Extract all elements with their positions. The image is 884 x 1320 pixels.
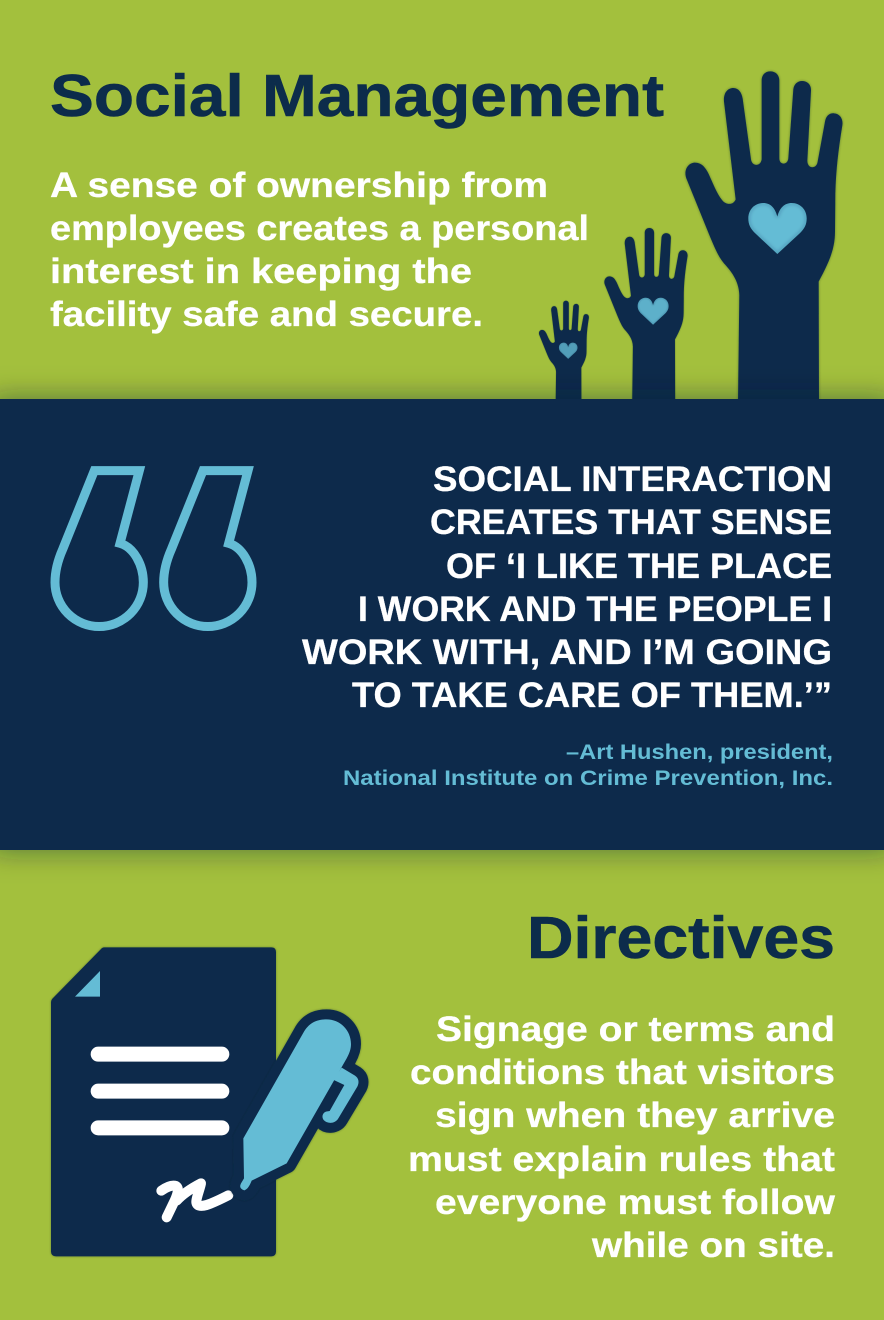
text block: pull quote: CREATES THAT SENSE: [430, 503, 832, 542]
icon: quotation marks: [55, 471, 252, 626]
icon: pen: [240, 1019, 359, 1190]
text block: social management description: employees creates a personal: [50, 209, 589, 248]
text block: directives description: while on site.: [591, 1226, 835, 1265]
heading: Directives: Directives: [527, 905, 835, 971]
icon: text lines: [91, 1047, 229, 1135]
text block: directives description: conditions that visitors: [410, 1053, 835, 1092]
icon: signed document with pen: [51, 947, 359, 1256]
text block: directives description: [408, 1010, 836, 1265]
icon: document page: [51, 947, 276, 1256]
text block: directives description: everyone must follow: [435, 1183, 836, 1222]
text block: social management description: A sense of ownership from: [50, 166, 548, 205]
text block: pull quote: [302, 460, 832, 715]
text block: pull quote: TO TAKE CARE OF THEM.’”: [352, 676, 832, 715]
text block: social management description: interest in keeping the: [50, 252, 472, 291]
text block: attribution: National Institute on Crime Prevention, Inc.: [343, 767, 833, 790]
text block: directives description: Signage or terms and: [436, 1010, 835, 1049]
icon: three raised hands with hearts: [539, 71, 843, 406]
text block: pull quote: OF ‘I LIKE THE PLACE: [446, 547, 832, 586]
text block: directives description: sign when they arrive: [435, 1096, 835, 1135]
icon: signature: [161, 1183, 228, 1217]
text block: directives description: must explain rules that: [408, 1140, 835, 1179]
title: Social Management: Social Management: [50, 63, 664, 129]
text block: pull quote: I WORK AND THE PEOPLE I: [358, 590, 832, 629]
icon: medium hand: [604, 228, 688, 404]
text block: social management description: [50, 166, 589, 334]
text block: social management description: facility safe and secure.: [50, 295, 483, 334]
text block: attribution: –Art Hushen, president,: [566, 741, 833, 764]
icon: page fold: [75, 971, 100, 997]
icon: small hand: [539, 301, 589, 406]
text block: attribution: [343, 741, 833, 790]
text block: pull quote: SOCIAL INTERACTION: [433, 460, 832, 499]
icon: large hand: [685, 71, 843, 403]
text block: pull quote: WORK WITH, AND I’M GOING: [302, 633, 832, 672]
panel: quote band: [0, 399, 884, 850]
